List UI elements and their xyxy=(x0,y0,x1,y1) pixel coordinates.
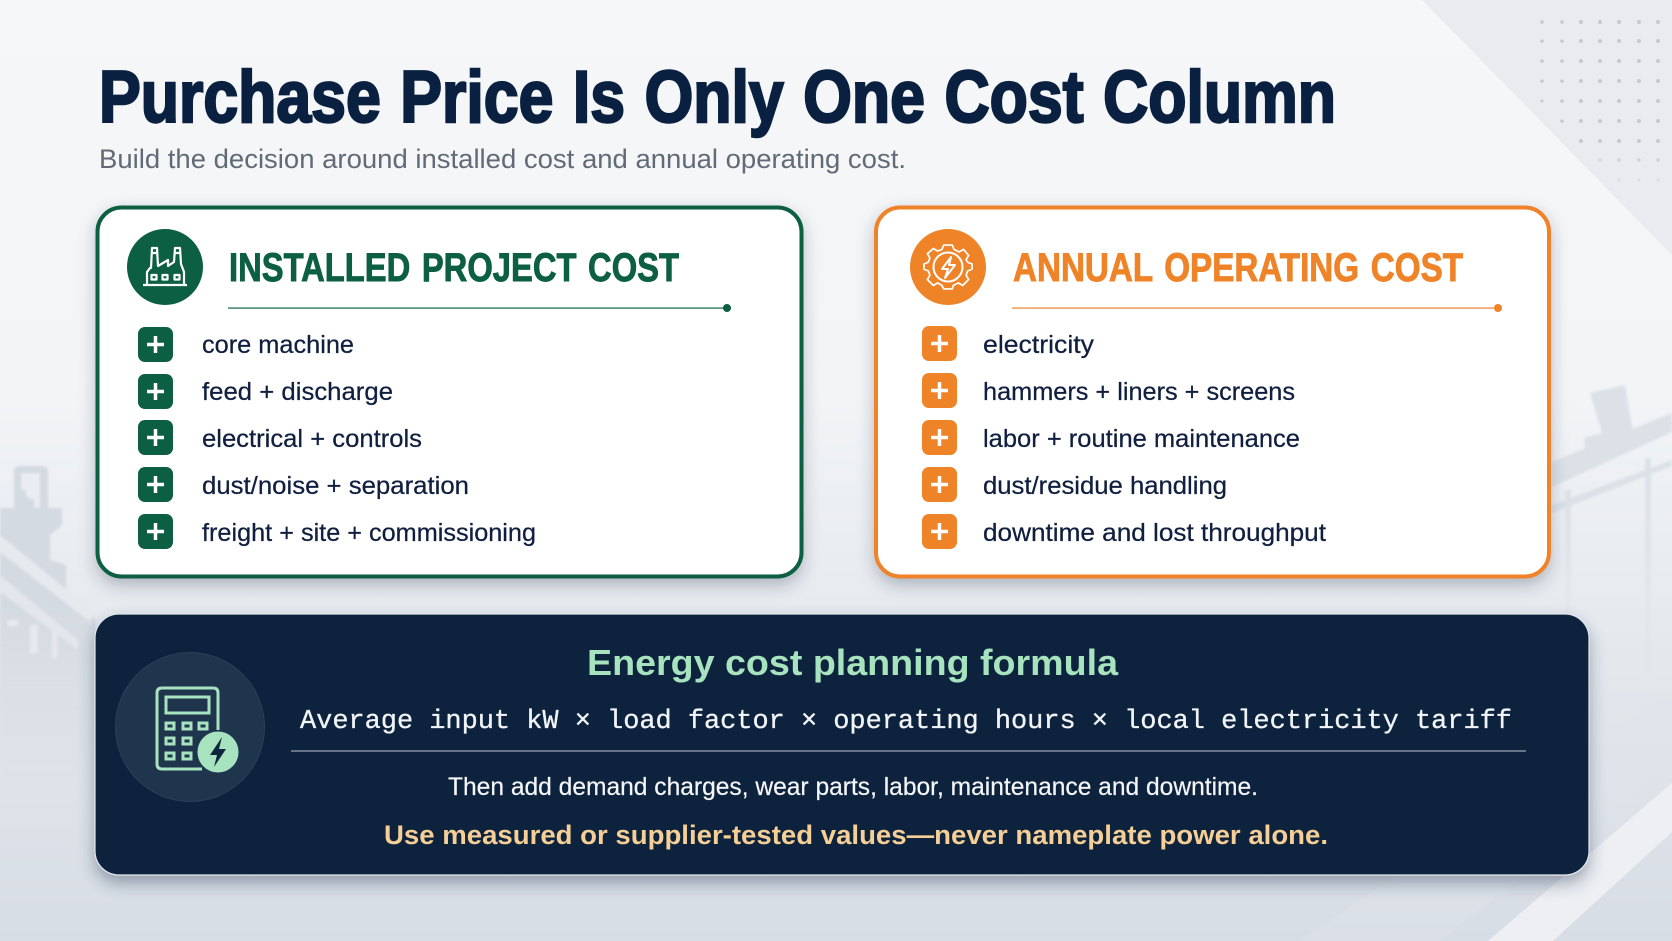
list item: feed + discharge: feed + discharge xyxy=(202,378,393,406)
list item: hammers + liners + screens xyxy=(922,373,1295,408)
list item: electricity: electricity xyxy=(983,331,1095,359)
list item: dust/noise + separation xyxy=(138,467,469,502)
list item: hammers + liners + screens: hammers + liners + screens xyxy=(983,378,1295,406)
heading rule xyxy=(1012,304,1502,312)
list item: electrical + controls: electrical + controls xyxy=(202,425,422,453)
list item: feed + discharge xyxy=(138,374,393,409)
heading: annual operating cost: ANNUAL OPERATING COST xyxy=(1013,246,1463,290)
list item: core machine xyxy=(138,327,354,362)
list item: dust/residue handling: dust/residue handling xyxy=(983,472,1227,500)
title: Purchase Price Is Only One Cost Column xyxy=(99,57,1336,138)
warning note: Use measured or supplier-tested values—never nameplate power alone. xyxy=(384,820,1328,850)
illustration: plant silhouette left xyxy=(0,466,96,800)
list item: labor + routine maintenance xyxy=(922,420,1300,455)
list item: downtime and lost throughput xyxy=(922,514,1326,549)
panel: installed project cost xyxy=(98,208,802,576)
list item: dust/residue handling xyxy=(922,467,1227,502)
panel: annual operating cost xyxy=(876,208,1549,576)
list item: dust/noise + separation: dust/noise + separation xyxy=(202,472,469,500)
additional costs note: Then add demand charges, wear parts, labor, maintenance and downtime. xyxy=(448,773,1258,801)
icon: factory xyxy=(127,229,203,305)
list item: labor + routine maintenance: labor + routine maintenance xyxy=(983,425,1300,453)
icon: calculator with lightning bolt xyxy=(116,652,264,802)
list item: core machine: core machine xyxy=(202,331,354,359)
heading rule xyxy=(228,304,731,312)
formula heading: Energy cost planning formula xyxy=(587,642,1119,683)
list item: electrical + controls xyxy=(138,420,422,455)
formula: Average input kW × load factor × operating hours × local electricity tariff xyxy=(300,707,1512,737)
list item: downtime and lost throughput: downtime and lost throughput xyxy=(983,519,1326,547)
panel: energy cost planning formula xyxy=(95,614,1589,875)
subtitle: Build the decision around installed cost and annual operating cost. xyxy=(99,144,906,174)
list item: freight + site + commissioning: freight + site + commissioning xyxy=(202,519,536,547)
heading: installed project cost: INSTALLED PROJECT COST xyxy=(229,246,679,290)
formula rule xyxy=(291,750,1526,752)
list item: freight + site + commissioning xyxy=(138,514,536,549)
illustration: conveyor silhouette right xyxy=(1552,385,1672,698)
list item: electricity xyxy=(922,326,1095,361)
icon: gear with lightning bolt xyxy=(910,229,986,305)
